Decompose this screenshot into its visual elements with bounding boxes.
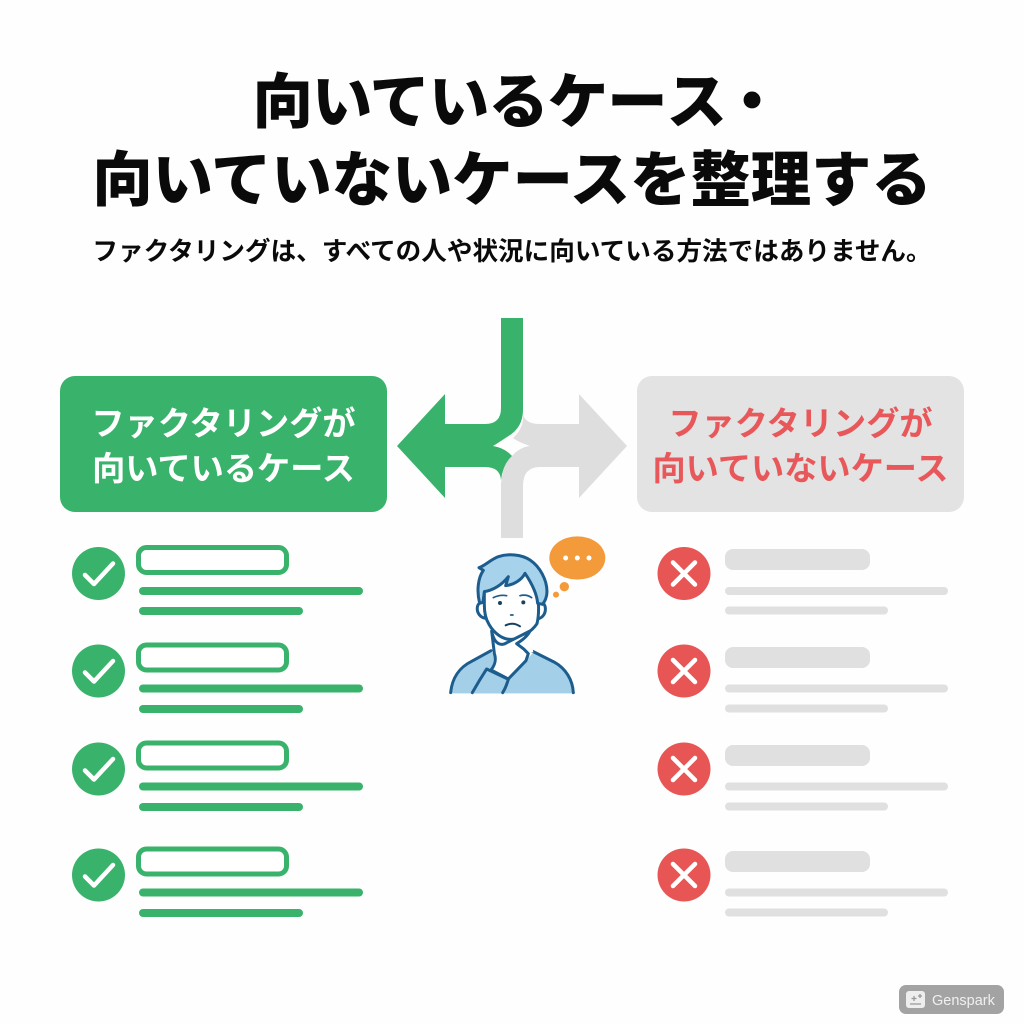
title: 向いていないケースを整理する: [92, 146, 932, 214]
panel: unsuitable cases heading: ファクタリングが: [668, 406, 933, 443]
figure: [450, 555, 574, 693]
icon: thinking person: [450, 536, 605, 693]
item 4 placeholder lines: [725, 851, 948, 916]
arrow: grey branch to right: [501, 394, 627, 538]
item 3 check: [72, 742, 125, 796]
watermark badge: Genspark: [932, 993, 996, 1009]
item 1 cross: [658, 547, 710, 600]
title: [92, 68, 932, 214]
item 1 placeholder lines: [725, 549, 948, 614]
speech bubble: [549, 536, 605, 598]
item 3 lines: [138, 743, 363, 811]
item 2 cross: [658, 644, 710, 698]
list: suitable items: [72, 547, 363, 917]
watermark badge: [899, 985, 1004, 1014]
body fill: [450, 651, 574, 693]
subtitle: ファクタリングは、すべての人や状況に向いている方法ではありません。: [92, 238, 932, 266]
item 4 check: [72, 848, 125, 902]
item 2 lines: [138, 645, 363, 713]
panel: suitable cases heading: [60, 376, 387, 512]
hair: [478, 555, 547, 604]
list: unsuitable items: [658, 547, 948, 916]
item 1 lines: [138, 548, 363, 615]
panel: unsuitable cases heading: [637, 376, 964, 512]
arrow: green branch to left: [397, 318, 523, 498]
hand: [491, 631, 530, 679]
sleeve cuff: [472, 669, 508, 693]
panel: suitable cases heading: 向いているケース: [92, 451, 355, 488]
item 2 check: [72, 644, 125, 698]
panel: unsuitable cases heading: 向いていないケース: [652, 451, 949, 488]
brows, eyes, nose and mouth: [493, 595, 532, 598]
body outline: [451, 650, 573, 693]
title: 向いているケース・: [253, 68, 781, 136]
item 4 lines: [138, 849, 363, 917]
item 3 placeholder lines: [725, 745, 948, 810]
ears: [477, 602, 545, 619]
neck and face: [484, 583, 539, 652]
item 3 cross: [658, 742, 710, 796]
item 4 cross: [658, 848, 710, 902]
panel: suitable cases heading: ファクタリングが: [91, 406, 356, 443]
item 2 placeholder lines: [725, 647, 948, 712]
item 1 check: [72, 547, 125, 600]
